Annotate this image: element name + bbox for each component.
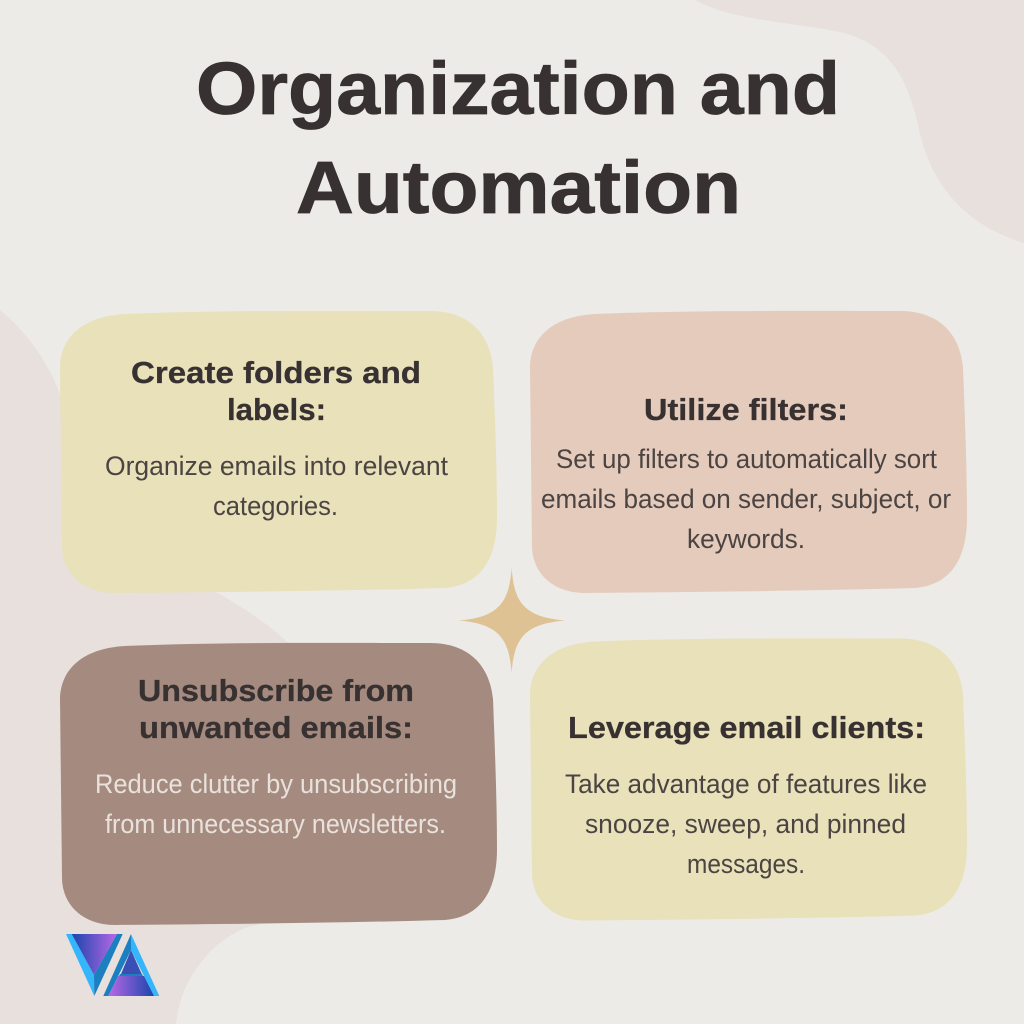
panel: create folders and labels xyxy=(60,311,497,593)
panel: leverage email clients: Leverage email clients: xyxy=(568,710,925,745)
background blob: top right xyxy=(695,0,1024,243)
panel: leverage email clients: messages. xyxy=(687,849,805,879)
panel: unsubscribe from unwanted emails xyxy=(60,643,497,925)
panel: unsubscribe from unwanted emails: Unsubscribe from xyxy=(138,673,414,708)
icon: VA logo xyxy=(66,934,159,996)
panel: leverage email clients xyxy=(530,638,967,920)
panel: unsubscribe from unwanted emails: Reduce clutter by unsubscribing xyxy=(95,769,457,799)
panel: create folders and labels: labels: xyxy=(227,392,326,427)
panel: create folders and labels: Organize emails into relevant xyxy=(105,451,448,481)
panel: utilize filters xyxy=(530,311,967,593)
panel: leverage email clients: snooze, sweep, and pinned xyxy=(585,809,906,839)
icon: four-point star xyxy=(459,568,565,673)
title xyxy=(196,47,840,229)
panel: utilize filters: Set up filters to automatically sort xyxy=(556,444,937,474)
panel: unsubscribe from unwanted emails: from unnecessary newsletters. xyxy=(105,809,446,839)
panel: utilize filters: Utilize filters: xyxy=(644,392,848,427)
background blob: bottom left xyxy=(0,310,480,1024)
panel: create folders and labels: categories. xyxy=(213,491,338,521)
panel: utilize filters: keywords. xyxy=(687,524,805,554)
panel: unsubscribe from unwanted emails: unwanted emails: xyxy=(139,710,413,745)
title: Organization and xyxy=(196,47,840,130)
panel: utilize filters: emails based on sender, subject, or xyxy=(541,484,951,514)
panel: leverage email clients: Take advantage of features like xyxy=(565,769,927,799)
title: Automation xyxy=(296,146,741,229)
panel: create folders and labels: Create folders and xyxy=(131,355,421,390)
